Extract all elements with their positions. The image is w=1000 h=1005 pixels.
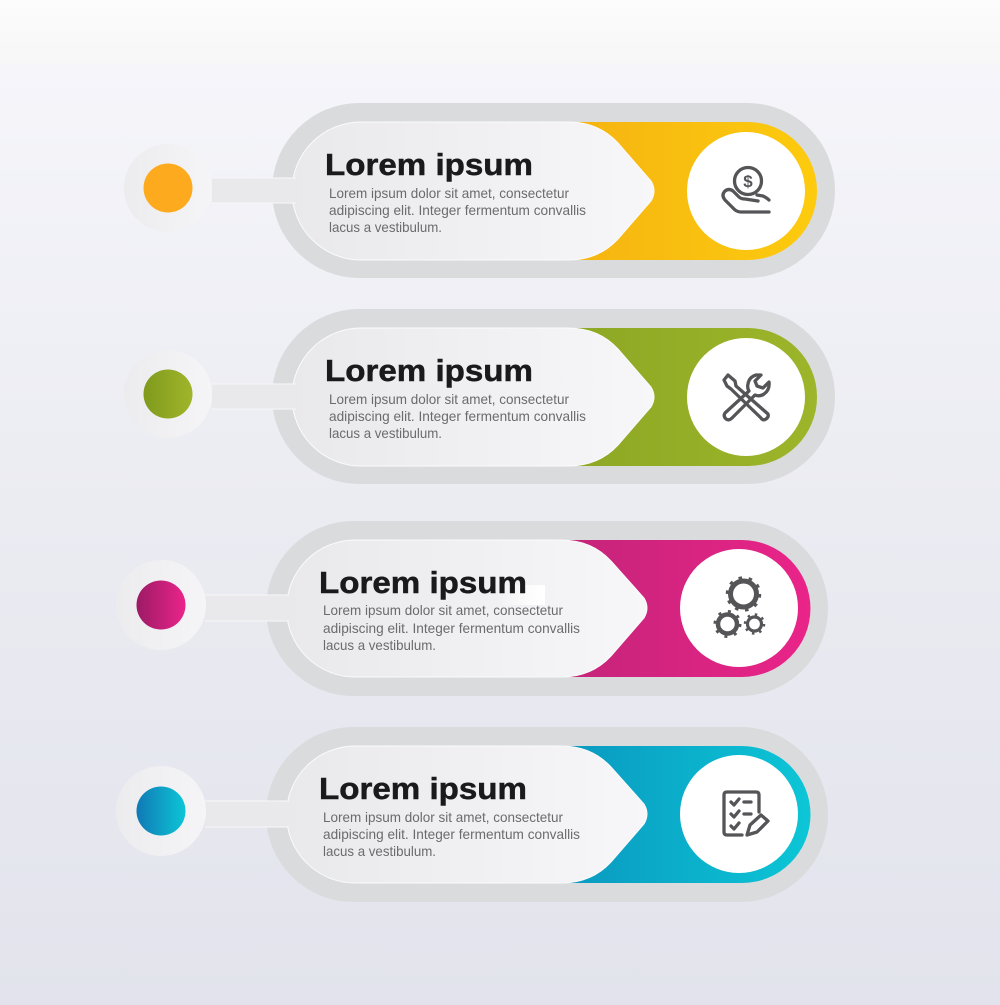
white patch behind heading 3 [497, 585, 545, 605]
node 3 [116, 560, 206, 650]
arrow panel 4 [286, 746, 647, 883]
icon: wrench and screwdriver [724, 375, 769, 420]
coloured band 1 [540, 122, 817, 260]
heading 1: Lorem ipsum [325, 147, 533, 182]
icon: coin in hand [723, 168, 769, 212]
connector 4 [205, 801, 290, 827]
arrow panel 1 [292, 122, 654, 260]
icon: gears [715, 578, 764, 636]
text block 4: lacus a vestibulum. [323, 843, 436, 859]
icon circle 4 [680, 755, 798, 873]
text block 1: adipiscing elit. Integer fermentum convallis [329, 202, 586, 218]
text block 4: Lorem ipsum dolor sit amet, consectetur [323, 809, 563, 825]
node 2 [124, 350, 212, 438]
panel: step 4 [116, 727, 828, 902]
text block 2 [329, 391, 586, 441]
text block 1: lacus a vestibulum. [329, 219, 442, 235]
outer grey pill 3 [266, 521, 828, 696]
text block 3: Lorem ipsum dolor sit amet, consectetur [323, 602, 563, 618]
icon: coin in hand: $ [743, 172, 753, 191]
connector 3 [205, 595, 290, 621]
outer grey pill 2 [272, 309, 835, 484]
connector 2 [212, 384, 297, 409]
outer grey pill 4 [266, 727, 828, 902]
text block 4 [323, 809, 580, 859]
text block 1: Lorem ipsum dolor sit amet, consectetur [329, 185, 569, 201]
outer grey pill 1 [272, 103, 835, 278]
heading 3: Lorem ipsum [319, 565, 527, 600]
text block 1 [329, 185, 586, 235]
panel: step 3 [116, 521, 828, 696]
text block 3 [323, 602, 580, 653]
text block 2: lacus a vestibulum. [329, 425, 442, 441]
arrow panel 2 [292, 328, 654, 466]
arrow panel 3 [287, 540, 647, 677]
connector 1 [212, 178, 297, 203]
text block 2: Lorem ipsum dolor sit amet, consectetur [329, 391, 569, 407]
panel: step 2 [124, 309, 835, 484]
icon circle 1 [687, 132, 805, 250]
text block 3: lacus a vestibulum. [323, 637, 436, 653]
icon: checklist and pencil [724, 792, 768, 835]
text block 4: adipiscing elit. Integer fermentum convallis [323, 826, 580, 842]
icon circle 3 [680, 549, 798, 667]
icon circle 2 [687, 338, 805, 456]
coloured band 2 [540, 328, 817, 466]
text block 3: adipiscing elit. Integer fermentum convallis [323, 620, 580, 636]
coloured band 3 [534, 540, 810, 677]
panel: step 1 [124, 103, 835, 278]
node 4 [116, 766, 206, 856]
node 1 [124, 144, 212, 232]
coloured band 4 [534, 746, 810, 883]
text block 2: adipiscing elit. Integer fermentum convallis [329, 408, 586, 424]
heading 2: Lorem ipsum [325, 353, 533, 388]
heading 4: Lorem ipsum [319, 771, 527, 806]
